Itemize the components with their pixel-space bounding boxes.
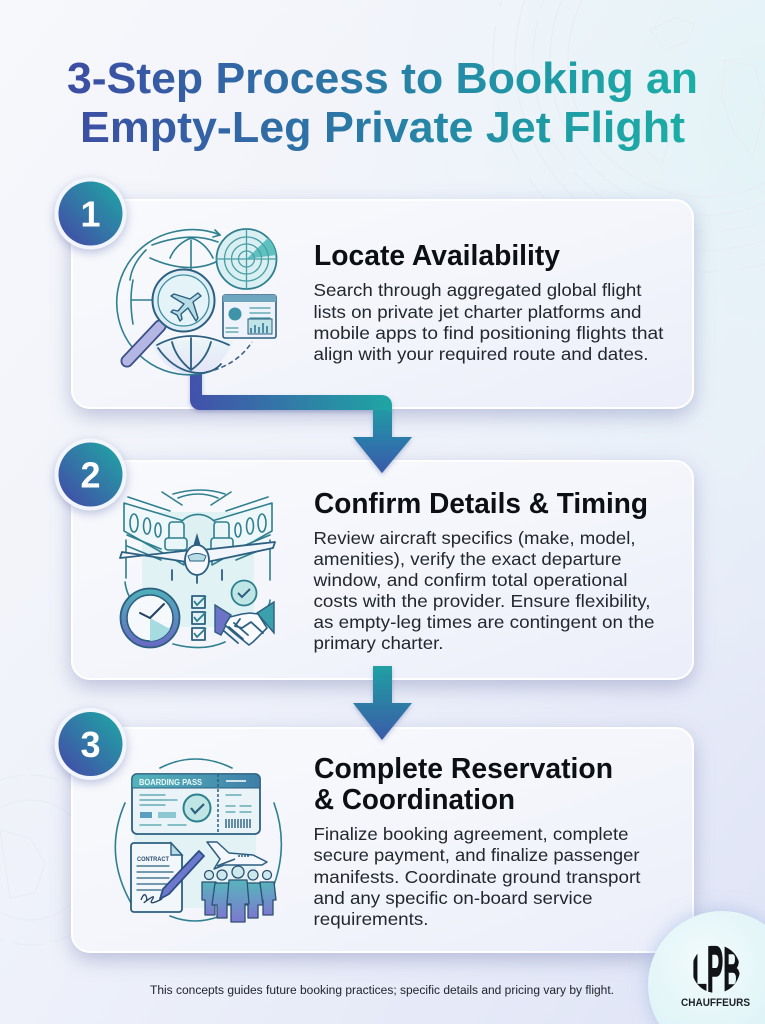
- title: 3-Step Process to Booking an: [67, 54, 698, 103]
- panel: step 1 card: [72, 200, 693, 408]
- text: step 2: primary charter.: [314, 633, 444, 653]
- text: step 1: mobile apps to find positioning flights that: [314, 323, 664, 343]
- text: step 3: manifests. Coordinate ground transport: [314, 867, 641, 887]
- panel: step 2 card: [72, 461, 693, 679]
- text: step 2: [312, 488, 654, 653]
- icon: cabin, plane, clock, checklist and handshake: [120, 490, 275, 648]
- text: step 1: lists on private jet charter platforms and: [314, 302, 642, 322]
- badge: step 1: [54, 178, 126, 250]
- text: step 2: window, and confirm total operational: [312, 570, 628, 590]
- title: Empty-Leg Private Jet Flight: [80, 103, 685, 152]
- text: step 3: secure payment, and finalize passenger: [314, 845, 640, 865]
- text: step 2: amenities), verify the exact departure: [314, 549, 622, 569]
- text: step 3: [314, 753, 641, 929]
- text: step 2: Confirm Details & Timing: [314, 488, 648, 520]
- text: step 3: Finalize booking agreement, complete: [314, 824, 628, 844]
- icon: boarding pass, contract, jet and passengers: CONTRACT: [137, 856, 169, 863]
- panel: step 3 card: [72, 728, 693, 952]
- title: [67, 54, 698, 152]
- text: step 2: costs with the provider. Ensure flexibility,: [314, 591, 650, 611]
- text: step 3: Complete Reservation: [314, 753, 613, 785]
- text: step 3: requirements.: [314, 909, 428, 929]
- text: step 1: Search through aggregated global flight: [314, 280, 642, 300]
- logo badge: [648, 911, 765, 1024]
- icon: boarding pass, contract, jet and passengers: BOARDING PASS: [139, 778, 203, 787]
- footer note: This concepts guides future booking practices; specific details and pricing vary by flight.: [150, 985, 614, 997]
- text: step 3: & Coordination: [314, 784, 515, 816]
- text: step 2: as empty-leg times are contingent on the: [314, 612, 654, 632]
- icon: boarding pass, contract, jet and passengers: [115, 759, 281, 922]
- badge: step 3: [54, 708, 126, 780]
- icon: globe, radar, magnifier and dashboard: [117, 229, 277, 375]
- badge: step 3: 3: [80, 724, 101, 765]
- logo badge: CHAUFFEURS: [681, 997, 750, 1009]
- text: step 1: align with your required route and dates.: [314, 344, 648, 364]
- badge: step 2: [54, 438, 126, 510]
- text: step 3: and any specific on-board service: [314, 888, 592, 908]
- logo badge: LPB: [692, 932, 741, 1007]
- arrow: step 2 to step 3: [353, 666, 412, 740]
- arrow: step 1 to step 2: [190, 368, 412, 473]
- badge: step 2: 2: [80, 454, 101, 496]
- text: step 1: Locate Availability: [314, 240, 560, 272]
- text: step 2: Review aircraft specifics (make, model,: [314, 528, 636, 548]
- text: step 1: [314, 240, 664, 364]
- badge: step 1: 1: [80, 194, 101, 234]
